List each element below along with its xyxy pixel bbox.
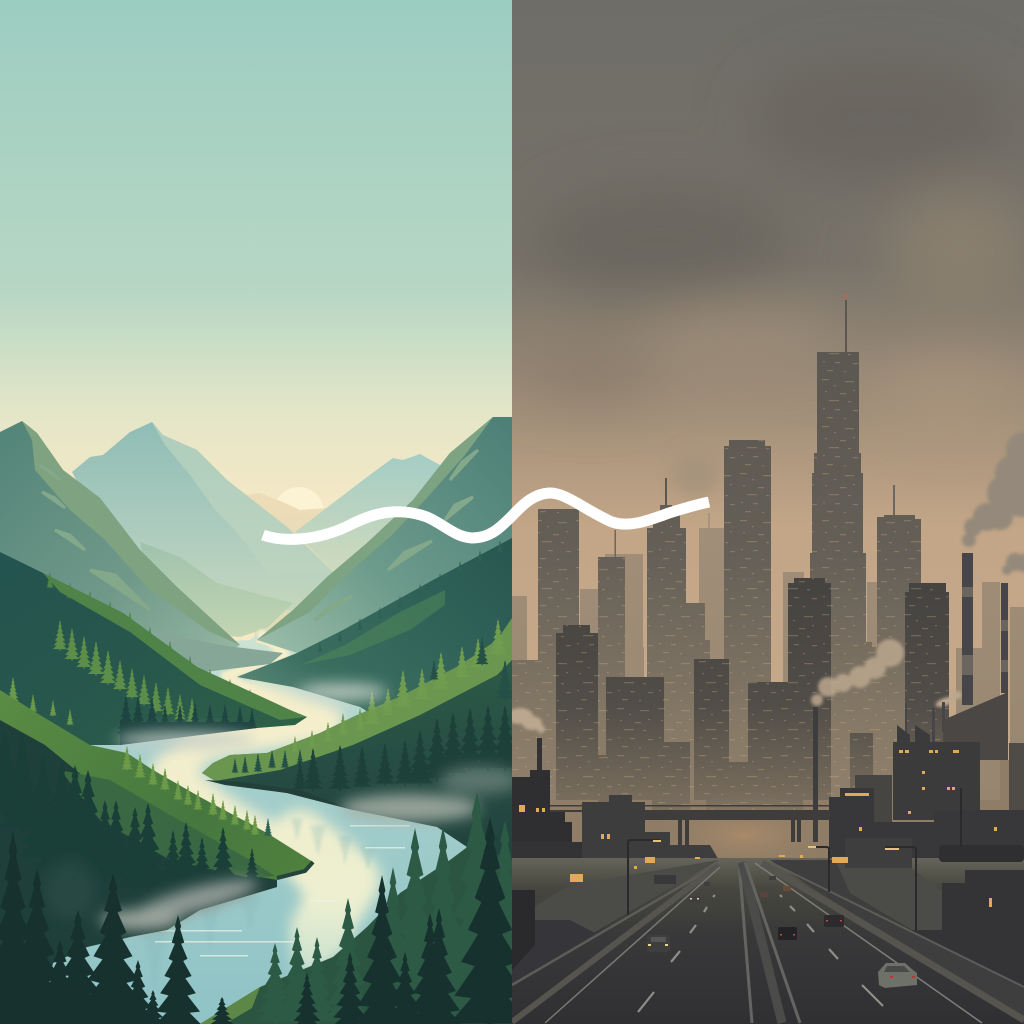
left buildings bbox=[512, 795, 720, 920]
left front slope bbox=[0, 690, 314, 982]
mist over far left shore bbox=[115, 731, 255, 749]
highway markings bbox=[512, 862, 1024, 1023]
tree reflections on water bbox=[291, 818, 372, 868]
billboard bbox=[654, 875, 676, 884]
cars bbox=[647, 876, 917, 988]
dark shoreline trees bbox=[116, 695, 257, 745]
far right forest slope bbox=[237, 538, 512, 711]
smog clouds bbox=[552, 88, 1024, 406]
far left forest slope bbox=[0, 552, 307, 745]
sun bbox=[278, 487, 324, 510]
distant smoke bbox=[674, 461, 716, 495]
sky gradient bbox=[0, 0, 512, 660]
smoggy sky bbox=[512, 0, 1024, 760]
peach ridge and valley glow bbox=[246, 493, 329, 636]
front towers bbox=[556, 578, 949, 810]
smoke plumes bbox=[507, 432, 1024, 733]
left dark block bbox=[512, 890, 535, 970]
right dark blocks bbox=[845, 838, 1024, 987]
back conifers bbox=[265, 792, 512, 985]
chimneys bbox=[537, 553, 1008, 842]
foreground right land bbox=[200, 845, 512, 1024]
left mountain bbox=[0, 421, 240, 660]
horizon glow bbox=[702, 807, 788, 852]
panel: nature scene bbox=[0, 0, 541, 1024]
factory silhouettes right bbox=[829, 692, 1024, 900]
right middle slope bbox=[202, 618, 521, 870]
slope light trees bbox=[121, 746, 260, 835]
right mountain bbox=[257, 417, 512, 653]
second hazy ridge bbox=[140, 542, 293, 637]
river sunlight band bbox=[168, 634, 350, 955]
mist over right slopes bbox=[297, 683, 520, 822]
slope dark trees bbox=[60, 765, 258, 878]
panel: city scene bbox=[507, 0, 1024, 1024]
ridge tree row bbox=[46, 572, 251, 692]
factory silhouettes left bbox=[512, 770, 572, 860]
left dark wedge bbox=[512, 920, 595, 985]
wavy white divider line bbox=[263, 493, 709, 539]
far left mountain bbox=[72, 422, 333, 620]
street lamps bbox=[628, 788, 961, 930]
river base bbox=[49, 630, 466, 1024]
lower left mist bbox=[45, 860, 261, 930]
haze behind bridge bbox=[550, 760, 1009, 858]
water streaks bbox=[142, 825, 410, 956]
distant left hazy forest bbox=[188, 642, 283, 672]
main skyscrapers bbox=[512, 295, 921, 800]
lamp lights bbox=[653, 840, 899, 850]
hazy back buildings bbox=[512, 528, 1024, 800]
lit windows bbox=[519, 750, 997, 907]
second green tree row bbox=[53, 620, 198, 722]
bridge bbox=[550, 805, 830, 846]
foreground dark conifers bbox=[0, 817, 531, 1024]
far right mountain bbox=[295, 454, 440, 572]
highway ground bbox=[512, 858, 1024, 1024]
